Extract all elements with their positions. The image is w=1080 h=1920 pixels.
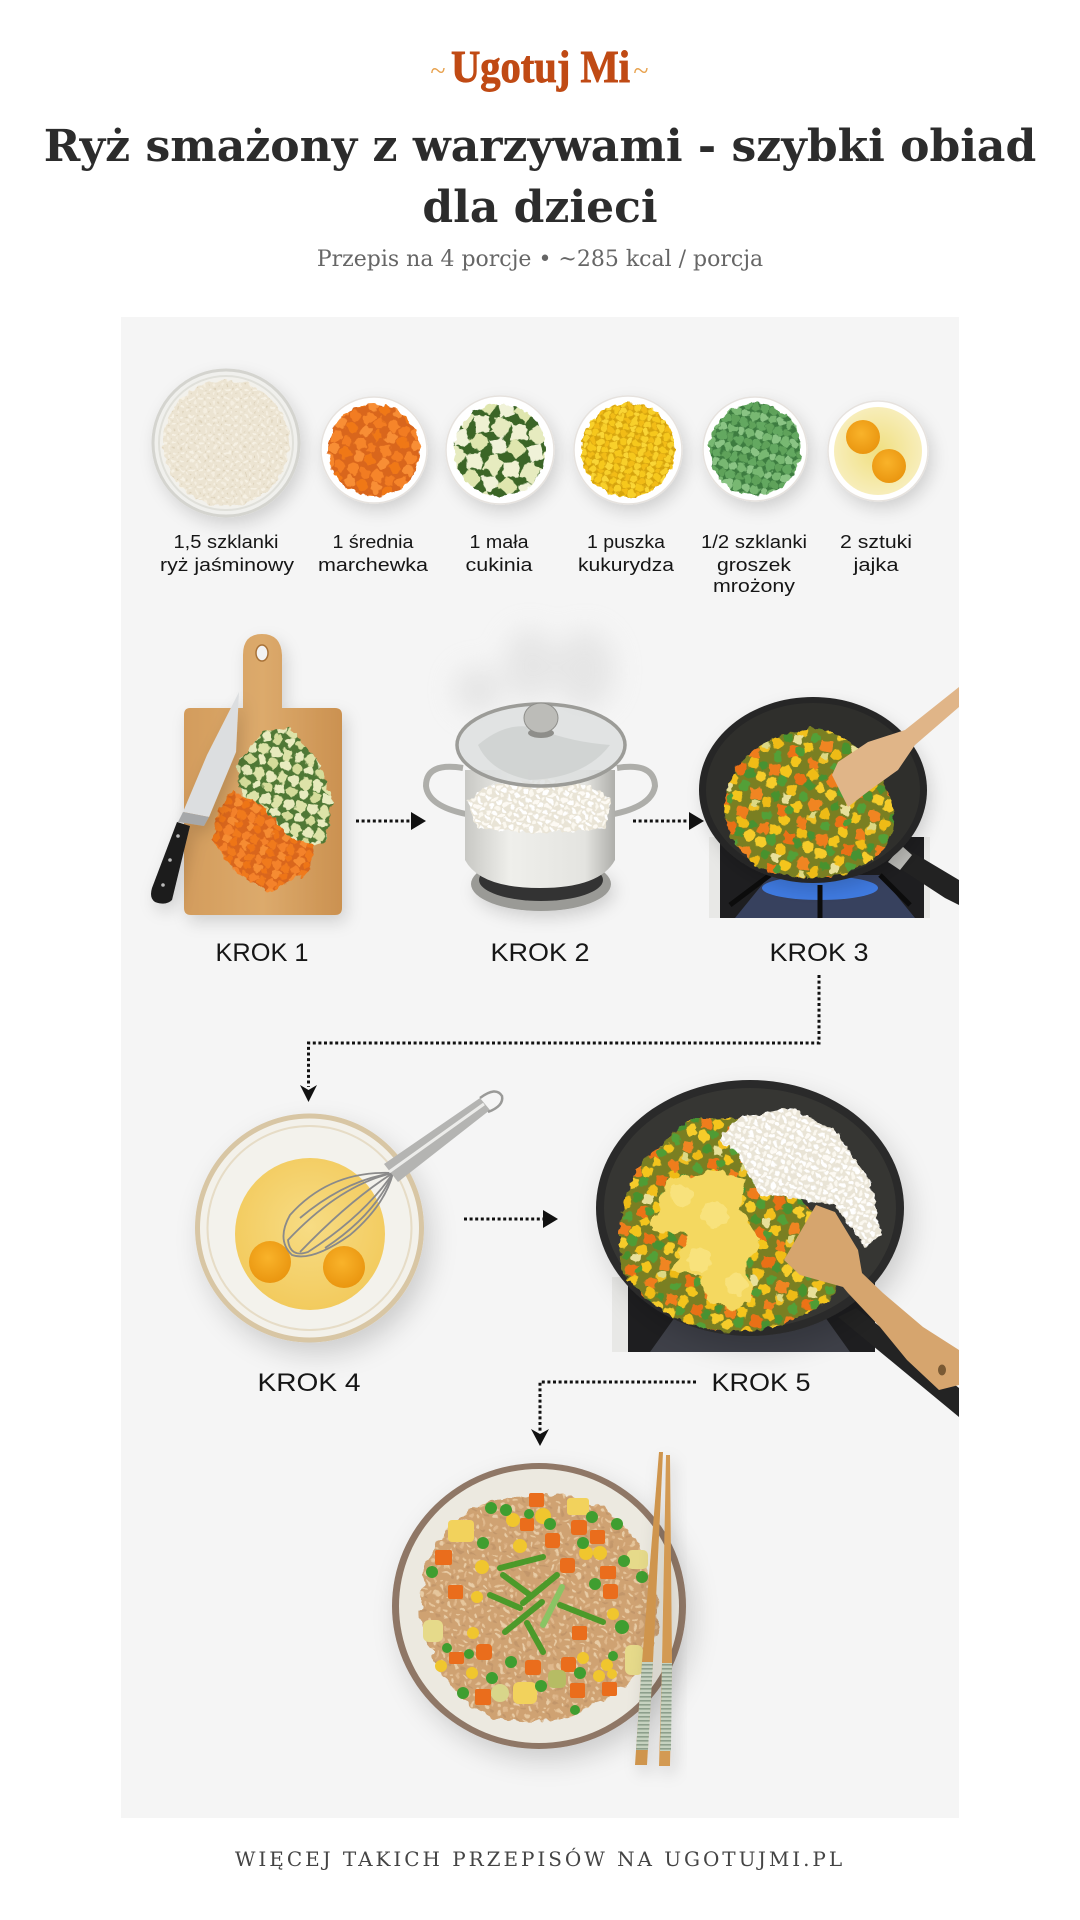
glass lid: [457, 704, 625, 786]
ingredient: jasmine rice: 1,5 szklanki: [174, 531, 278, 552]
chopped carrot pile: [212, 790, 314, 892]
pan handle: [924, 859, 959, 905]
footer call to action: WIĘCEJ TAKICH PRZEPISÓW NA UGOTUJMI.PL: [235, 1846, 845, 1871]
white rice: [718, 1108, 881, 1248]
arrow: step 3 to 4: [300, 975, 819, 1102]
ingredient: frozen peas: [701, 397, 807, 596]
gas stove: [612, 1277, 628, 1352]
ingredient: jasmine rice: ryż jaśminowy: [160, 554, 295, 575]
chopsticks: [635, 1452, 672, 1766]
step 1: cutting board: [151, 634, 342, 967]
step 3: vegetables in pan: [699, 687, 959, 967]
green peas: [426, 1502, 648, 1715]
ingredient: corn: kukurydza: [578, 554, 675, 575]
arrow: step 2 to 3: [633, 812, 704, 830]
wooden spatula: [784, 1205, 959, 1390]
pot body: [465, 770, 615, 888]
ingredient: frozen peas: 1/2 szklanki: [701, 531, 807, 552]
step 4: whisked eggs: [198, 1091, 502, 1397]
ingredient: corn: 1 puszka: [587, 531, 666, 552]
ingredient: zucchini: [446, 396, 554, 575]
scrambled egg: [650, 1170, 760, 1312]
pot handles: [426, 767, 466, 814]
beaten egg: [235, 1158, 385, 1310]
rice in pot: [468, 780, 610, 832]
arrow: step 1 to 2: [356, 812, 426, 830]
ingredient: zucchini: cukinia: [466, 554, 533, 575]
whisk: [283, 1091, 502, 1256]
ingredient: carrot: 1 średnia: [332, 531, 414, 552]
wooden board: [184, 634, 342, 915]
step 1 label: KROK 1: [216, 939, 308, 967]
brand logo: ~: [430, 56, 446, 87]
step 3 label: KROK 3: [770, 939, 868, 967]
steam: [454, 629, 615, 714]
ingredient: eggs: jajka: [852, 554, 899, 575]
burner: [471, 857, 611, 911]
ingredient: frozen peas: groszek: [717, 554, 792, 575]
step 5 label: KROK 5: [712, 1369, 810, 1397]
step 4 label: KROK 4: [258, 1369, 361, 1397]
ingredients row: [153, 370, 928, 596]
ingredient: zucchini: 1 mała: [470, 531, 529, 552]
panel: recipe illustration: [121, 317, 959, 1818]
knife: [151, 692, 239, 904]
ingredient: carrot: marchewka: [318, 554, 429, 575]
title: Ryż smażony z warzywami - szybki obiad: [44, 121, 1036, 172]
vegetable mix: [724, 728, 894, 878]
ingredient: corn: [574, 396, 682, 575]
title: [44, 121, 1036, 233]
ingredient: eggs: [828, 401, 928, 575]
ingredient: eggs: 2 sztuki: [840, 531, 912, 552]
frying pan: [596, 1080, 904, 1336]
finished dish: [392, 1452, 686, 1766]
ingredient: carrot: [318, 397, 429, 575]
title: dla dzieci: [422, 182, 658, 233]
carrots: [435, 1493, 618, 1705]
chopped zucchini pile: [236, 728, 332, 850]
step 2 label: KROK 2: [490, 939, 590, 967]
plate: [392, 1463, 686, 1749]
pan handle: [875, 1322, 959, 1417]
wooden spatula: [832, 687, 959, 807]
yellow corn and egg: [423, 1498, 648, 1704]
step 5: rice and egg in pan: [596, 1080, 959, 1417]
gas stove: [709, 837, 930, 918]
brand logo: ~: [633, 56, 649, 87]
brand logo: Ugotuj Mi: [451, 41, 630, 92]
scallion garnish: [490, 1557, 603, 1652]
subtitle: Przepis na 4 porcje • ~285 kcal / porcja: [317, 247, 763, 272]
arrow: step 5 to finished dish: [531, 1382, 696, 1446]
vegetable mix: [619, 1118, 845, 1332]
step 2: steaming pot: [426, 629, 655, 967]
fried rice: [421, 1495, 658, 1722]
glass bowl: [198, 1116, 422, 1340]
frying pan: [699, 697, 927, 883]
ingredient: jasmine rice: [153, 370, 299, 575]
arrow: step 4 to 5: [464, 1210, 558, 1228]
ingredient: frozen peas: mrożony: [713, 575, 796, 596]
